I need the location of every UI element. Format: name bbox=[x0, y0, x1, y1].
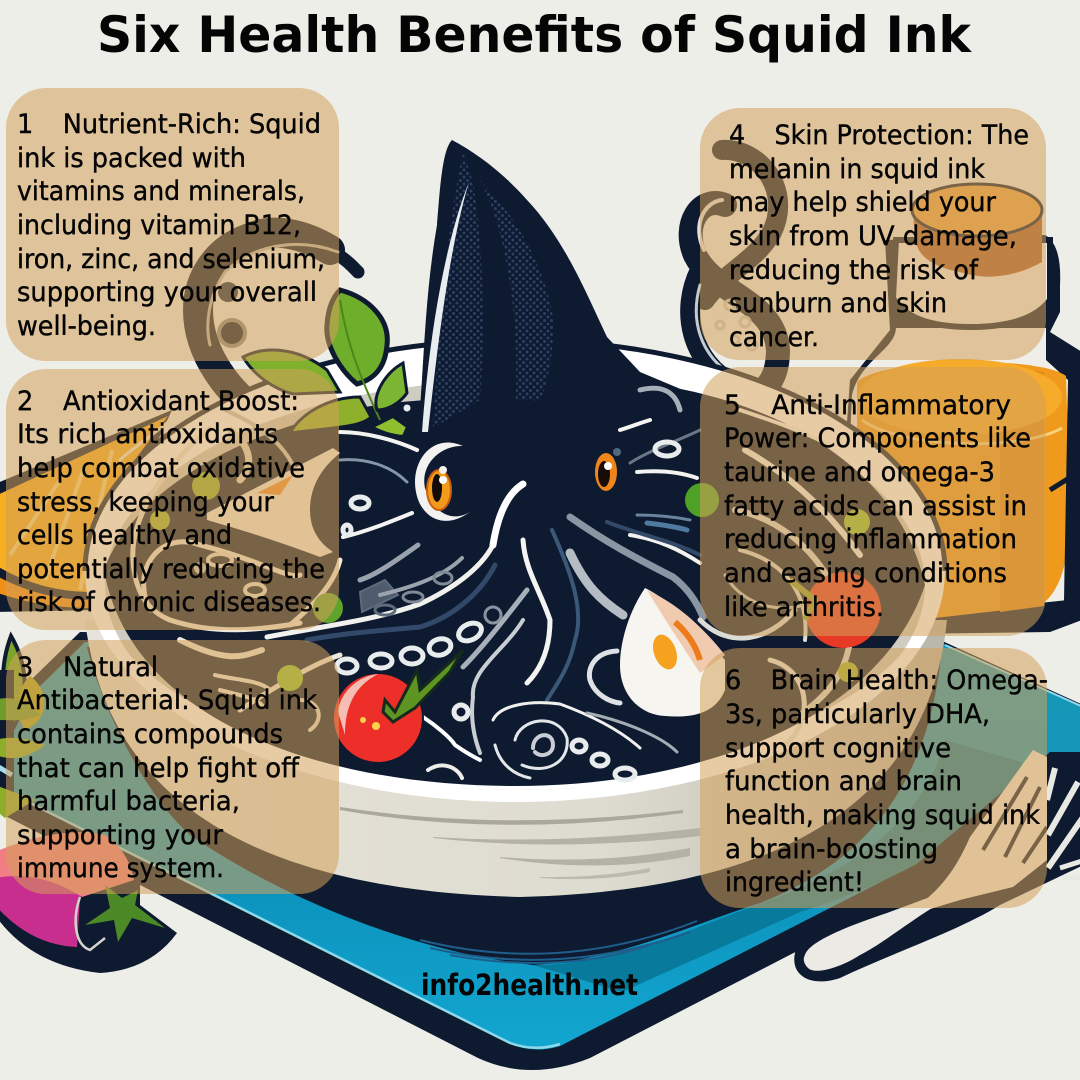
panel 2: antioxidant boost: Its rich antioxidants bbox=[17, 419, 278, 450]
squid head bbox=[400, 400, 650, 610]
right tentacle curling over the bottle bbox=[690, 150, 778, 400]
left garnish: green leaves bbox=[0, 636, 45, 818]
panel 1: nutrient-rich: iron, zinc, and selenium, bbox=[17, 244, 325, 275]
panel 6: brain health: health, making squid ink bbox=[725, 800, 1040, 831]
panel 3: natural antibacterial: harmful bacteria, bbox=[17, 786, 240, 817]
panel 5: anti-inflammatory power bbox=[700, 367, 1046, 636]
panel 6: brain health: 6 Brain Health: Omega- bbox=[725, 665, 1048, 696]
panel 5: anti-inflammatory power: Power: Components like bbox=[724, 423, 1031, 454]
mantle skin texture bbox=[433, 152, 483, 428]
panel 3: natural antibacterial bbox=[6, 640, 339, 894]
footer website: info2health.net bbox=[421, 968, 638, 1002]
panel 5: anti-inflammatory power: reducing inflammation bbox=[724, 524, 1017, 555]
squid body bbox=[400, 140, 700, 610]
panel 3: natural antibacterial: immune system. bbox=[17, 853, 224, 884]
side leaf bbox=[243, 350, 340, 394]
panel 5: anti-inflammatory power: fatty acids can assist in bbox=[724, 491, 1027, 522]
tomato slice under panel five bbox=[790, 572, 881, 648]
bottle of oil with cork bbox=[840, 184, 1080, 634]
panel 3: natural antibacterial: 3 Natural bbox=[17, 652, 158, 683]
panel 4: skin protection: reducing the risk of bbox=[729, 255, 979, 286]
panel 2: antioxidant boost: 2 Antioxidant Boost: bbox=[17, 386, 299, 417]
panel 4: skin protection bbox=[700, 108, 1046, 360]
squid ink filling the bowl bbox=[104, 380, 925, 786]
panel 3: natural antibacterial: supporting your bbox=[17, 820, 224, 851]
panel 3: natural antibacterial: that can help fight off bbox=[17, 753, 300, 784]
panel 6: brain health: ingredient! bbox=[725, 867, 864, 898]
panel 6: brain health: function and brain bbox=[725, 766, 962, 797]
panel 2: antioxidant boost: potentially reducing the bbox=[17, 554, 325, 585]
lower leaf bbox=[290, 397, 371, 433]
panel 6: brain health: 3s, particularly DHA, bbox=[725, 699, 990, 730]
white fork bbox=[794, 750, 1080, 981]
basil leaves bbox=[243, 290, 410, 436]
panel 6: brain health: a brain-boosting bbox=[725, 834, 938, 865]
squid mantle fin bbox=[418, 140, 700, 440]
small leaf bbox=[376, 363, 407, 410]
squid tentacles with white outlines bbox=[267, 388, 860, 778]
panel 5: anti-inflammatory power: 5 Anti-Inflammatory bbox=[724, 390, 1011, 421]
panel 4: skin protection: may help shield your bbox=[729, 187, 997, 218]
fork head bbox=[925, 750, 1047, 910]
panel 1: nutrient-rich: supporting your overall bbox=[17, 277, 317, 308]
panel 1: nutrient-rich: including vitamin B12, bbox=[17, 210, 301, 241]
white bowl bbox=[85, 340, 947, 897]
big leaf bbox=[327, 290, 387, 384]
panel 6: brain health: support cognitive bbox=[725, 733, 951, 764]
mantle highlight bbox=[422, 182, 469, 432]
panel 5: anti-inflammatory power: and easing conditions bbox=[724, 558, 1007, 589]
fork handle bbox=[804, 897, 932, 971]
left swirl of tentacles behind panels bbox=[120, 410, 340, 730]
panel 5: anti-inflammatory power: taurine and omega-3 bbox=[724, 457, 995, 488]
left eye bbox=[415, 442, 470, 521]
panel 6: brain health bbox=[700, 648, 1048, 908]
green herb flecks bbox=[150, 472, 870, 691]
tomato with green stem bbox=[332, 650, 463, 764]
dark blue shadow on tray bbox=[533, 740, 1022, 992]
shadow stripes bbox=[420, 921, 697, 963]
blue serving tray bbox=[0, 632, 1080, 1070]
panel 1: nutrient-rich: vitamins and minerals, bbox=[17, 176, 305, 207]
panel 1: nutrient-rich: well-being. bbox=[17, 311, 156, 342]
panel 4: skin protection: skin from UV damage, bbox=[729, 221, 1017, 252]
panel 1: nutrient-rich: ink is packed with bbox=[17, 143, 246, 174]
panel 2: antioxidant boost: risk of chronic diseases. bbox=[17, 587, 321, 618]
panel 4: skin protection: melanin in squid ink bbox=[729, 154, 985, 185]
panel 1: nutrient-rich: 1 Nutrient-Rich: Squid bbox=[17, 109, 321, 140]
bowl shadow bbox=[87, 647, 942, 965]
panel 2: antioxidant boost: help combat oxidative bbox=[17, 453, 305, 484]
panel 4: skin protection: 4 Skin Protection: The bbox=[729, 120, 1029, 151]
title: Six Health Benefits of Squid Ink bbox=[97, 6, 973, 64]
panel 3: natural antibacterial: Antibacterial: Squid ink bbox=[17, 685, 317, 716]
cream wedge with orange flesh bbox=[207, 448, 340, 557]
egg wedge bbox=[620, 588, 725, 717]
beet slice garnish bbox=[0, 832, 177, 973]
panel 3: natural antibacterial: contains compounds bbox=[17, 719, 283, 750]
right eye bbox=[595, 448, 621, 491]
fork shadow bbox=[794, 752, 1080, 981]
panel 4: skin protection: cancer. bbox=[729, 322, 819, 353]
lemon wedge bbox=[0, 410, 172, 612]
left tentacle tip bbox=[198, 233, 358, 425]
tentacle suckers (rings) bbox=[337, 442, 679, 780]
panel 2: antioxidant boost bbox=[6, 369, 339, 630]
panel 2: antioxidant boost: cells healthy and bbox=[17, 520, 232, 551]
panel 5: anti-inflammatory power: like arthritis. bbox=[724, 592, 884, 623]
panel 2: antioxidant boost: stress, keeping your bbox=[17, 487, 275, 518]
panel 1: nutrient-rich bbox=[6, 88, 339, 361]
panel 4: skin protection: sunburn and skin bbox=[729, 288, 947, 319]
